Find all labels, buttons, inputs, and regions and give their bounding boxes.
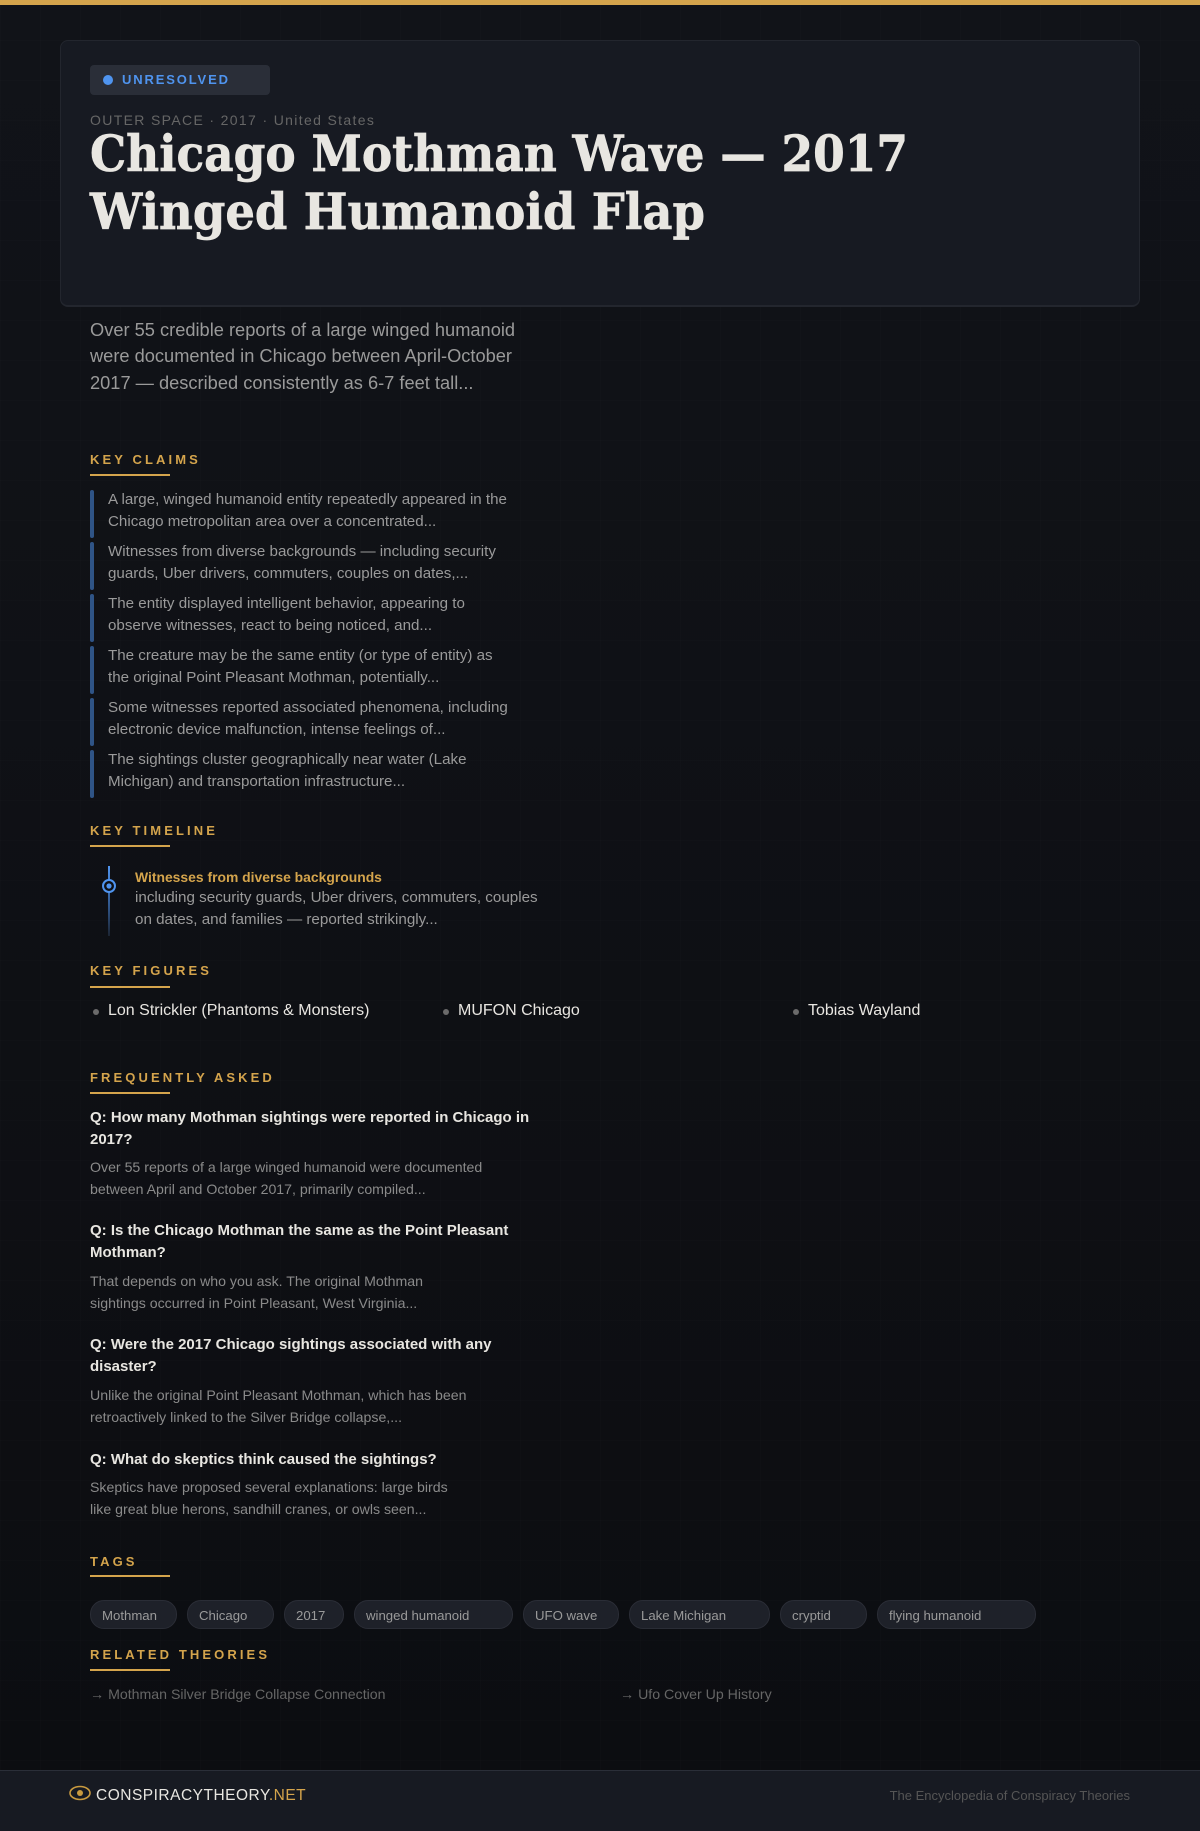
tag: Mothman — [90, 1600, 177, 1629]
heading: key timeline: KEY TIMELINE — [90, 823, 218, 838]
claim 6 — [90, 750, 467, 798]
claim 4 — [90, 646, 493, 694]
title: Winged Humanoid Flap — [89, 182, 705, 241]
faq answer 4: Skeptics have proposed several explanations: large birds — [90, 1479, 448, 1495]
heading: related theories: RELATED THEORIES — [90, 1647, 270, 1662]
claim 3 — [90, 594, 465, 642]
key figure: Lon Strickler: Lon Strickler (Phantoms & Monsters) — [108, 1002, 369, 1019]
claim 6: The sightings cluster geographically near water (Lake — [108, 751, 467, 768]
faq answer 3: retroactively linked to the Silver Bridge collapse,... — [90, 1409, 402, 1425]
faq question 1: 2017? — [90, 1131, 133, 1148]
timeline entry text: including security guards, Uber drivers, commuters, couples — [135, 889, 538, 906]
faq answer 3: Unlike the original Point Pleasant Mothman, which has been — [90, 1387, 467, 1403]
title — [89, 124, 908, 241]
timeline entry — [135, 869, 538, 928]
faq answer 1: between April and October 2017, primarily compiled... — [90, 1181, 426, 1197]
faq answer 4: like great blue herons, sandhill cranes, or owls seen... — [90, 1501, 426, 1517]
tag: Chicago: Chicago — [199, 1608, 247, 1623]
claim 1: Chicago metropolitan area over a concentrated... — [108, 513, 436, 530]
faq answer 1: Over 55 reports of a large winged humanoid were documented — [90, 1159, 482, 1175]
heading: tags: TAGS — [90, 1554, 138, 1569]
category meta line: OUTER SPACE · 2017 · United States — [90, 112, 375, 128]
timeline entry text: on dates, and families — reported strikingly... — [135, 911, 438, 928]
claim 2: guards, Uber drivers, commuters, couples on dates,... — [108, 565, 468, 582]
tag: Mothman: Mothman — [102, 1608, 157, 1623]
tag: cryptid: cryptid — [792, 1608, 831, 1623]
faq question 2 — [90, 1222, 508, 1261]
intro summary: Over 55 credible reports of a large winged humanoid — [90, 319, 515, 340]
top accent bar — [0, 0, 1200, 5]
tag: winged humanoid: winged humanoid — [366, 1608, 469, 1623]
claim 3: observe witnesses, react to being noticed, and... — [108, 617, 432, 634]
title: Chicago Mothman Wave — 2017 — [90, 124, 908, 183]
tag: flying humanoid — [877, 1600, 1036, 1629]
heading: key figures: KEY FIGURES — [90, 963, 212, 978]
claim 1 — [90, 490, 507, 538]
faq question 2: Mothman? — [90, 1244, 166, 1261]
related link: cover up: → Ufo Cover Up History — [620, 1686, 772, 1702]
badge label: UNRESOLVED — [122, 72, 230, 87]
faq question 2: Q: Is the Chicago Mothman the same as the Point Pleasant — [90, 1222, 508, 1239]
logo wordmark: CONSPIRACYTHEORY.NET — [96, 1787, 306, 1804]
claim 6: Michigan) and transportation infrastructure... — [108, 773, 405, 790]
tag: Chicago — [187, 1600, 274, 1629]
faq answer 2 — [90, 1273, 423, 1311]
panel: key claims list — [90, 490, 508, 798]
heading: key claims: KEY CLAIMS — [90, 452, 201, 467]
faq answer 2: That depends on who you ask. The original Mothman — [90, 1273, 423, 1289]
footer tagline: The Encyclopedia of Conspiracy Theories — [890, 1788, 1130, 1803]
heading: frequently asked: FREQUENTLY ASKED — [90, 1070, 275, 1085]
panel: footer — [0, 1770, 1200, 1831]
tag: UFO wave — [523, 1600, 619, 1629]
timeline entry title: Witnesses from diverse backgrounds — [135, 869, 382, 885]
faq answer 1 — [90, 1159, 482, 1197]
tag: flying humanoid: flying humanoid — [889, 1608, 981, 1623]
key figure: MUFON Chicago: MUFON Chicago — [458, 1002, 580, 1019]
related link: silver bridge: → Mothman Silver Bridge Collapse Connection — [90, 1686, 386, 1702]
intro summary: were documented in Chicago between April-October — [90, 345, 512, 366]
claim 5 — [90, 698, 508, 746]
intro summary — [90, 319, 515, 393]
faq question 4: Q: What do skeptics think caused the sightings? — [90, 1451, 437, 1468]
faq answer 2: sightings occurred in Point Pleasant, West Virginia... — [90, 1295, 417, 1311]
claim 1: A large, winged humanoid entity repeatedly appeared in the — [108, 491, 507, 508]
icon: eye logo — [69, 1786, 91, 1800]
tag: Lake Michigan: Lake Michigan — [641, 1608, 726, 1623]
icon: status dot — [103, 75, 113, 85]
tag: 2017 — [284, 1600, 344, 1629]
intro summary: 2017 — described consistently as 6-7 feet tall... — [90, 372, 473, 392]
claim 5: electronic device malfunction, intense feelings of... — [108, 721, 446, 738]
tag: 2017: 2017 — [296, 1608, 325, 1623]
faq question 1: Q: How many Mothman sightings were reported in Chicago in — [90, 1109, 529, 1126]
tag: UFO wave: UFO wave — [535, 1608, 597, 1623]
key figure: Tobias Wayland: Tobias Wayland — [808, 1002, 920, 1019]
claim 5: Some witnesses reported associated phenomena, including — [108, 699, 508, 716]
claim 3: The entity displayed intelligent behavior, appearing to — [108, 595, 465, 612]
tag: cryptid — [780, 1600, 867, 1629]
tag: winged humanoid — [354, 1600, 513, 1629]
tag: Lake Michigan — [629, 1600, 770, 1629]
status badge: unresolved — [90, 65, 270, 95]
faq question 3 — [90, 1336, 492, 1375]
faq question 3: Q: Were the 2017 Chicago sightings associated with any — [90, 1336, 492, 1353]
faq question 3: disaster? — [90, 1358, 157, 1375]
claim 4: The creature may be the same entity (or type of entity) as — [108, 647, 493, 664]
timeline marker — [102, 866, 116, 936]
faq question 1 — [90, 1109, 529, 1148]
timeline entry text — [135, 889, 538, 928]
claim 4: the original Point Pleasant Mothman, potentially... — [108, 669, 439, 686]
faq answer 4 — [90, 1479, 448, 1517]
claim 2: Witnesses from diverse backgrounds — including security — [108, 543, 496, 560]
panel: hero header — [60, 40, 1140, 307]
claim 2 — [90, 542, 496, 590]
faq answer 3 — [90, 1387, 467, 1425]
